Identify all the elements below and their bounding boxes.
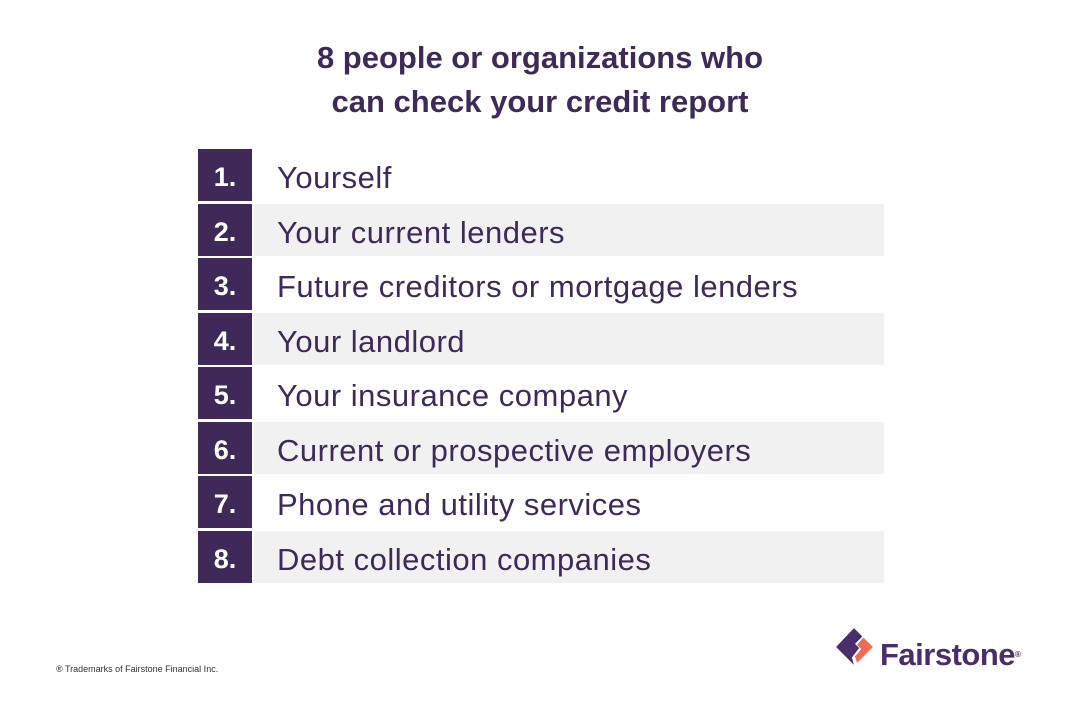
- row 7: [198, 476, 642, 528]
- row 5: Your insurance company: [277, 378, 628, 413]
- row 8: [198, 531, 884, 583]
- row 3: Future creditors or mortgage lenders: [277, 269, 798, 304]
- row 7: Phone and utility services: [277, 487, 642, 522]
- row 5: 5.: [214, 380, 236, 410]
- row 1: Yourself: [277, 160, 392, 195]
- title: [317, 40, 763, 119]
- icon: logo diamond: [836, 628, 873, 665]
- row 3: 3.: [214, 271, 236, 301]
- row 4: [198, 313, 884, 365]
- row 8: 8.: [214, 544, 236, 574]
- row 7: 7.: [214, 489, 236, 519]
- list: [198, 149, 884, 583]
- row 6: Current or prospective employers: [277, 432, 751, 468]
- row 6: 6.: [214, 434, 236, 464]
- title: can check your credit report: [332, 84, 748, 119]
- title: 8 people or organizations who: [317, 40, 763, 75]
- row 4: 4.: [214, 326, 236, 356]
- row 3: [198, 258, 798, 310]
- logo: [836, 628, 1021, 672]
- footnote: ® Trademarks of Fairstone Financial Inc.: [56, 664, 218, 674]
- row 5: [198, 367, 628, 419]
- row 1: 1.: [214, 162, 236, 192]
- row 4: Your landlord: [277, 324, 465, 358]
- row 2: [198, 204, 884, 256]
- row 2: Your current lenders: [277, 214, 565, 250]
- row 8: Debt collection companies: [277, 542, 651, 576]
- row 2: 2.: [214, 216, 236, 246]
- row 1: [198, 149, 392, 201]
- logo text: Fairstone®: [880, 637, 1020, 672]
- row 6: [198, 422, 884, 474]
